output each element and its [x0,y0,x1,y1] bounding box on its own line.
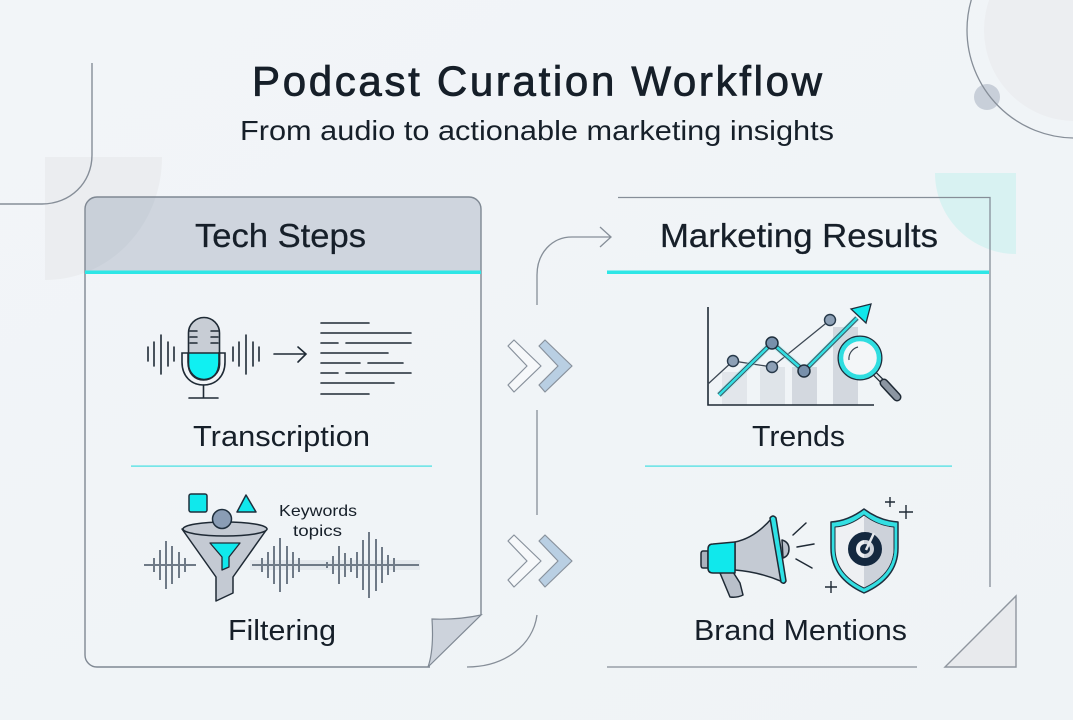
divider [131,466,432,467]
decor: left corner line [0,63,92,204]
page curl [428,615,481,667]
subtitle: From audio to actionable marketing insights [240,115,834,146]
label: keywords topics: topics [293,523,342,540]
icon: trend chart [708,304,897,405]
title: Podcast Curation Workflow [252,58,823,104]
panel: marketing results [607,198,990,667]
divider [645,466,952,467]
decor: bottom right triangle [945,596,1016,667]
decor: teal quarter shape [935,173,1016,254]
icon: filter funnel with waveform [144,494,420,601]
label: keywords topics [279,503,357,540]
label: brand mentions: Brand Mentions [694,615,907,647]
panel header fill [86,198,480,270]
chevrons: lower [508,535,572,587]
label: filtering: Filtering [228,615,336,647]
decor: left quarter shape [45,157,162,280]
label: trends: Trends [752,421,845,453]
panel: tech steps [84,196,483,668]
icon: megaphone and shield [701,497,913,597]
label: keywords topics: Keywords [279,503,357,520]
header accent line [85,270,481,274]
connector: arrow path [467,227,611,667]
heading: tech steps: Tech Steps [195,217,366,254]
icon: microphone to text [148,318,411,398]
panel outline [85,197,481,667]
panel frame lines [607,198,990,667]
header accent line [607,270,989,274]
label: transcription: Transcription [193,421,370,453]
decor: top right circle [967,0,1073,138]
chevrons: upper [508,340,572,392]
heading: marketing results: Marketing Results [660,217,938,254]
